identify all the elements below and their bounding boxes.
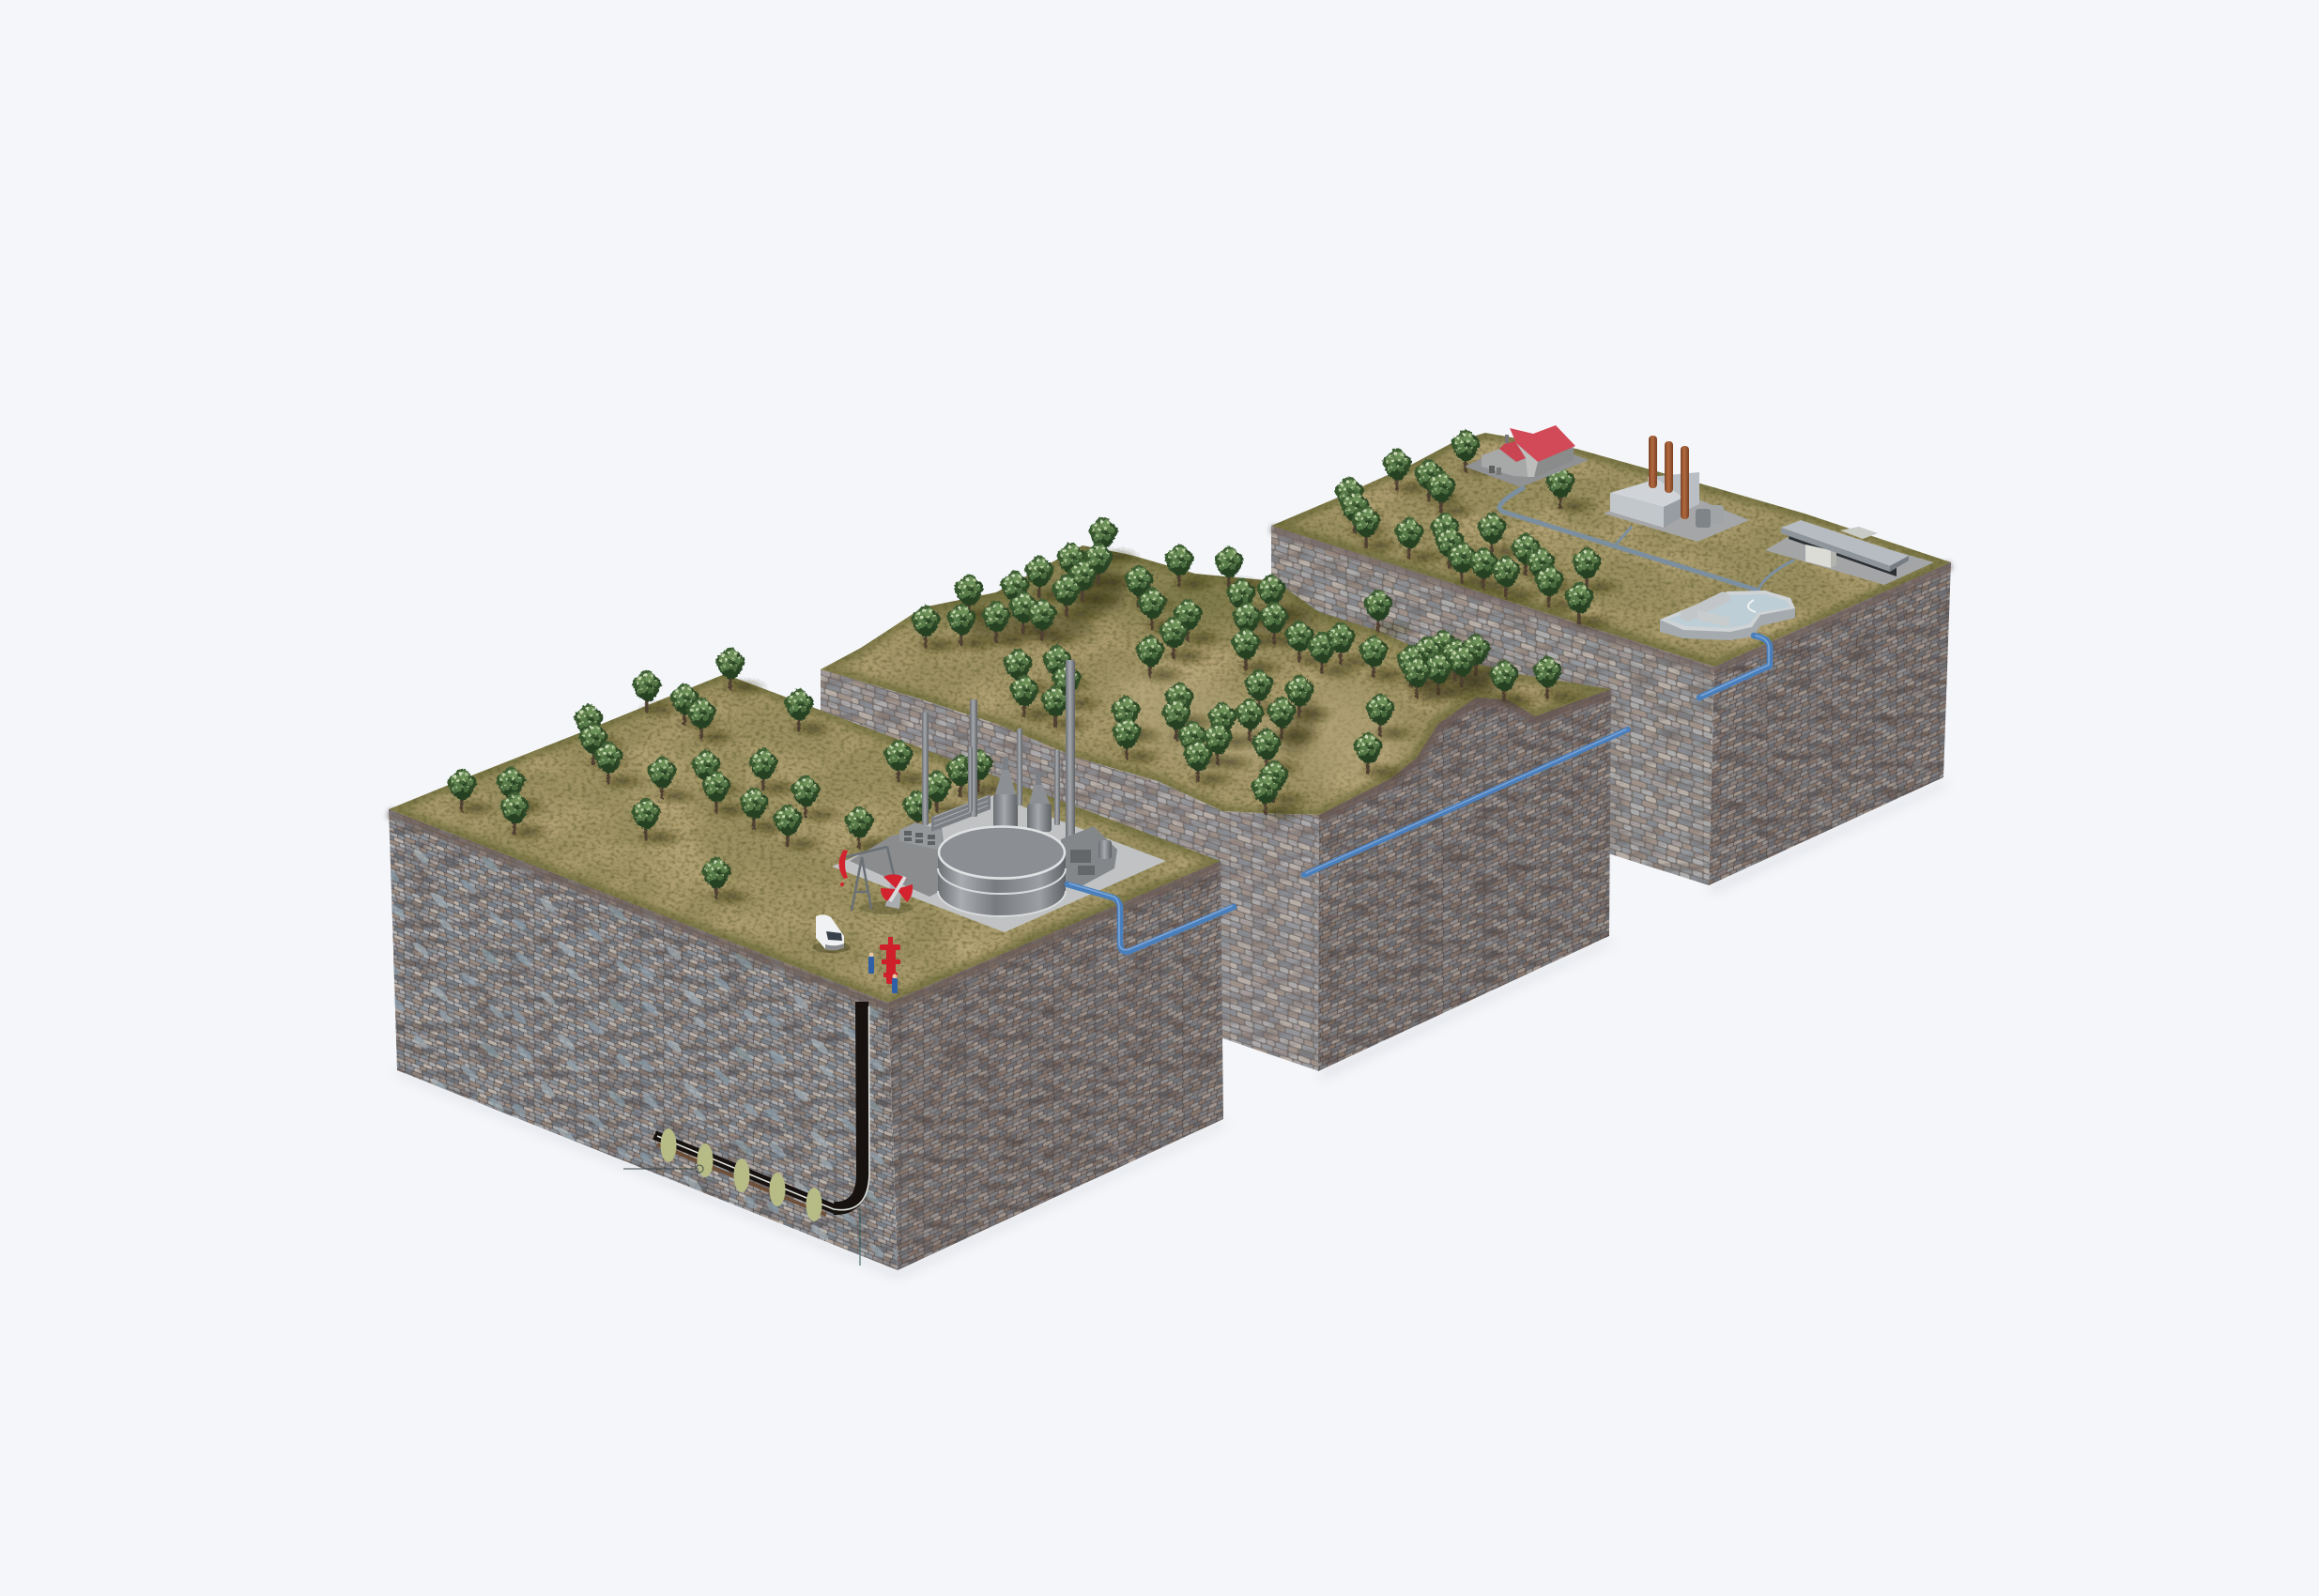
ground shadow block 3 bbox=[1709, 781, 1945, 892]
grass top block 2 bbox=[821, 545, 1611, 815]
fracture pods bbox=[661, 1128, 822, 1221]
stone wall left face block 2 bbox=[821, 669, 1319, 1071]
block 1: front terrain with refinery and well bbox=[389, 648, 1234, 1277]
ground shadow block 1 bbox=[397, 1070, 1225, 1277]
house with red roof bbox=[1465, 425, 1589, 487]
trees block 1 bbox=[448, 648, 1017, 907]
stone wall right face block 3 bbox=[1709, 562, 1951, 885]
callout line vertical bbox=[859, 1208, 861, 1266]
blue pipe block 1 bbox=[1067, 883, 1234, 952]
surface pipes block 3 bbox=[1499, 488, 1793, 590]
callout line horizontal bbox=[623, 1165, 703, 1173]
stone wall left face block 1 bbox=[389, 809, 898, 1270]
tree shadows block 2 bbox=[962, 569, 1521, 760]
grass edge block 1 bbox=[389, 674, 1221, 1003]
pump jack bbox=[839, 847, 914, 914]
stone wall right face block 1 bbox=[888, 861, 1223, 1270]
concrete pad bbox=[832, 795, 1166, 932]
stone wall left face block 3 bbox=[1271, 526, 1714, 885]
blue pipe block 2 bbox=[1304, 729, 1628, 875]
refinery bbox=[850, 660, 1117, 897]
soil strip block 3 bbox=[1271, 529, 1951, 669]
water treatment basin bbox=[1660, 591, 1795, 640]
white van bbox=[813, 914, 851, 953]
red wellhead bbox=[880, 937, 900, 984]
well bore bbox=[654, 1002, 869, 1215]
soil strip block 1 bbox=[389, 813, 1221, 1006]
trees block 3 bbox=[1335, 430, 1625, 632]
soil strip block 2 bbox=[1319, 692, 1611, 818]
storage tank bbox=[938, 826, 1066, 917]
ground shadow block 2 bbox=[1318, 939, 1611, 1078]
grass edge block 3 bbox=[1271, 433, 1951, 667]
trees block 2 bbox=[912, 517, 1586, 822]
worker right bbox=[892, 974, 898, 993]
block 2: middle hillside terrain bbox=[821, 517, 1628, 1078]
block 3: back terrain with settlement, factory and treatment bbox=[1271, 425, 1951, 892]
factory with three chimneys bbox=[1604, 436, 1749, 542]
grass top block 3 bbox=[1271, 433, 1951, 667]
shed with canopy bbox=[1765, 520, 1934, 585]
stone wall right face block 2 bbox=[1318, 689, 1611, 1071]
hill shading block 2 bbox=[821, 545, 1611, 815]
illustration: three isometric ground blocks bbox=[384, 425, 1955, 1278]
grass top block 1 bbox=[389, 674, 1221, 1003]
worker left bbox=[868, 952, 874, 974]
blue pipe block 3 bbox=[1699, 636, 1770, 698]
